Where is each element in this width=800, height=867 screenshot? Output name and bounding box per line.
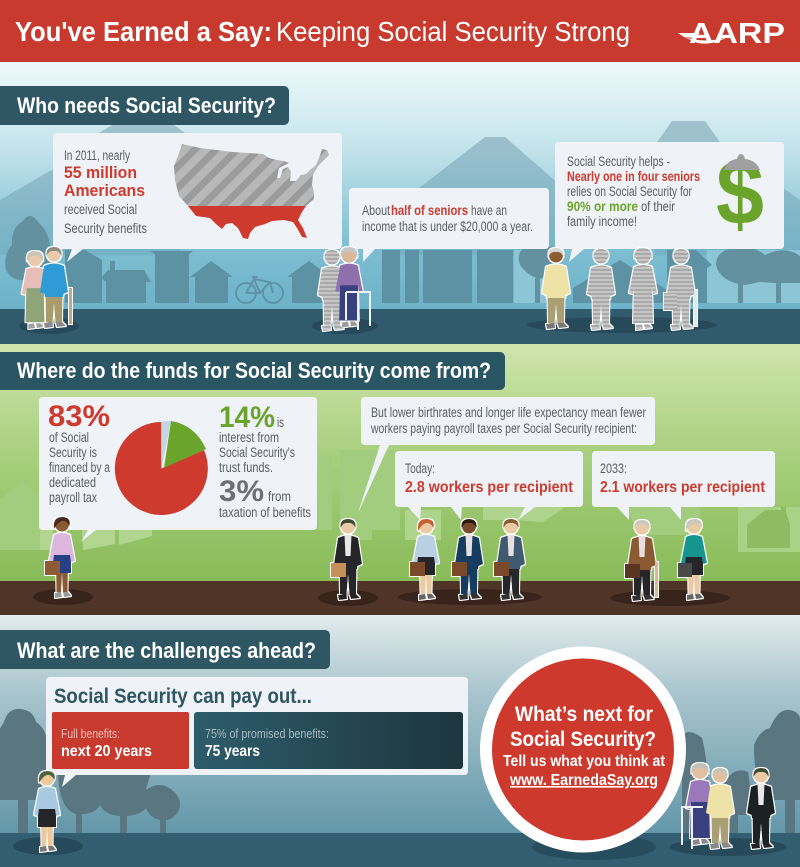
- title: You've Earned a Say:: [15, 16, 272, 47]
- callout: 55 million Americans: In 2011, nearly: [64, 148, 130, 163]
- callout: lower birthrates: [358, 397, 655, 513]
- icon: walker: [346, 292, 370, 330]
- callout: funding sources: 14%: [219, 401, 275, 434]
- call to action circle: [480, 646, 686, 860]
- figures: elderly couple: [19, 247, 79, 334]
- callout: 2033 2.1 workers: 2033:: [600, 461, 627, 476]
- callout: funding sources: is: [277, 415, 284, 430]
- callout: 2033 2.1 workers: 2.1 workers per recipient: [600, 479, 766, 496]
- figures: ghost with woman and walker: [312, 247, 378, 334]
- bar: 75 percent of promised benefits: 75 years: [205, 743, 260, 760]
- icon: walker: [682, 807, 703, 849]
- callout: funding sources: trust funds.: [219, 460, 273, 475]
- figures: one senior and three ghosts: [527, 248, 717, 333]
- background: hazy mountain houses: [0, 115, 800, 255]
- pie chart: 83 / 14 / 3: [115, 421, 208, 515]
- callout: funding sources: payroll tax: [49, 490, 97, 505]
- background: who needs panel: [0, 60, 800, 310]
- callout: today 2.8 workers: 2.8 workers per recipient: [405, 479, 574, 496]
- figures: three workers today: [398, 519, 542, 605]
- callout: funding sources: taxation of benefits: [219, 505, 311, 520]
- background: pale buildings: [514, 250, 800, 303]
- bar: 75 percent of promised benefits: 75% of promised benefits:: [205, 727, 329, 741]
- map: United States, lower portion red: [174, 144, 329, 239]
- callout: half of seniors: half of seniors: [391, 203, 468, 218]
- callout: today 2.8 workers: Today:: [405, 461, 435, 476]
- callout: 2033 2.1 workers: [592, 451, 775, 520]
- callout: today 2.8 workers: [395, 451, 583, 520]
- callout: funding sources: financed by a: [49, 460, 110, 475]
- bar: 75 percent of promised benefits: [194, 712, 463, 769]
- callout: half of seniors: [349, 188, 549, 262]
- background: funds panel: [0, 344, 800, 582]
- callout: funding sources: from: [268, 489, 291, 504]
- call to action circle: www. EarnedaSay.org: [509, 772, 658, 789]
- ground: who needs panel: [0, 309, 800, 344]
- callout: funding sources: 83%: [48, 400, 110, 433]
- callout: nearly one in four seniors: relies on Social Security for: [567, 184, 692, 199]
- callout: funding sources: Social Security's: [219, 445, 295, 460]
- figures: seniors and man in suit: [670, 763, 786, 856]
- callout: nearly one in four seniors: 90% or more: [567, 199, 638, 214]
- callout: funding sources: dedicated: [49, 475, 96, 490]
- callout: lower birthrates: But lower birthrates and longer life expectancy mean fewer: [371, 405, 646, 420]
- icon: dollar sign with dome: $: [716, 142, 764, 244]
- callout: half of seniors: income that is under $20,000 a year.: [362, 219, 533, 234]
- heading: challenges: What are the challenges ahead?: [17, 638, 316, 663]
- bar: full benefits: Full benefits:: [61, 727, 120, 741]
- ground: challenges panel: [0, 833, 800, 867]
- callout: half of seniors: About: [362, 203, 390, 218]
- callout: lower birthrates: workers paying payroll taxes per Social Security recipient:: [370, 421, 637, 436]
- callout: nearly one in four seniors: Nearly one in four seniors: [567, 169, 700, 184]
- callout: funding sources: 3%: [219, 475, 264, 508]
- callout: 55 million Americans: Security benefits: [64, 221, 147, 236]
- background: challenges panel: [0, 615, 800, 835]
- figure: woman with briefcase: [33, 517, 93, 605]
- callout: 55 million Americans: received Social: [64, 202, 137, 217]
- background: trees: [0, 709, 800, 834]
- figure: man in suit: [318, 519, 378, 606]
- background: house silhouettes: [65, 250, 712, 303]
- panel: Social Security can pay out: Social Security can pay out...: [54, 685, 312, 708]
- figure: woman with speech bubble: [13, 771, 83, 855]
- heading: who needs social security: Who needs Social Security?: [17, 93, 276, 118]
- bar: full benefits: next 20 years: [61, 743, 152, 760]
- call to action circle: Tell us what you think at: [503, 753, 666, 770]
- callout: funding sources: interest from: [219, 430, 279, 445]
- callout: 55 million Americans: 55 million: [64, 163, 137, 182]
- header bar: Keeping Social Security Strong: [276, 16, 630, 47]
- callout: 55 million Americans: Americans: [64, 181, 145, 200]
- callout: half of seniors: have an: [471, 203, 507, 218]
- call to action circle: What’s next for: [515, 703, 653, 726]
- figures: two workers 2033: [610, 519, 730, 606]
- heading: funds: Where do the funds for Social Security come from?: [17, 358, 491, 383]
- background: trees: [5, 216, 800, 303]
- panel: Social Security can pay out: [46, 677, 468, 787]
- callout: nearly one in four seniors: [555, 142, 784, 262]
- logo: AARP: AARP: [689, 18, 785, 50]
- heading: who needs social security: [0, 86, 289, 125]
- header bar: [0, 0, 800, 62]
- call to action circle: Social Security?: [510, 728, 656, 751]
- callout: funding sources: [39, 397, 317, 542]
- heading: funds: [0, 352, 505, 390]
- callout: nearly one in four seniors: Social Security helps -: [567, 154, 670, 169]
- heading: challenges: [0, 630, 330, 669]
- callout: funding sources: Security is: [49, 445, 97, 460]
- bar: full benefits: [52, 712, 189, 769]
- callout: nearly one in four seniors: family income!: [567, 214, 637, 229]
- callout: nearly one in four seniors: of their: [641, 199, 675, 214]
- ground: funds panel: [0, 581, 800, 615]
- callout: funding sources: of Social: [49, 430, 89, 445]
- icon: bicycle: [236, 277, 283, 303]
- callout: 55 million Americans: [53, 133, 342, 262]
